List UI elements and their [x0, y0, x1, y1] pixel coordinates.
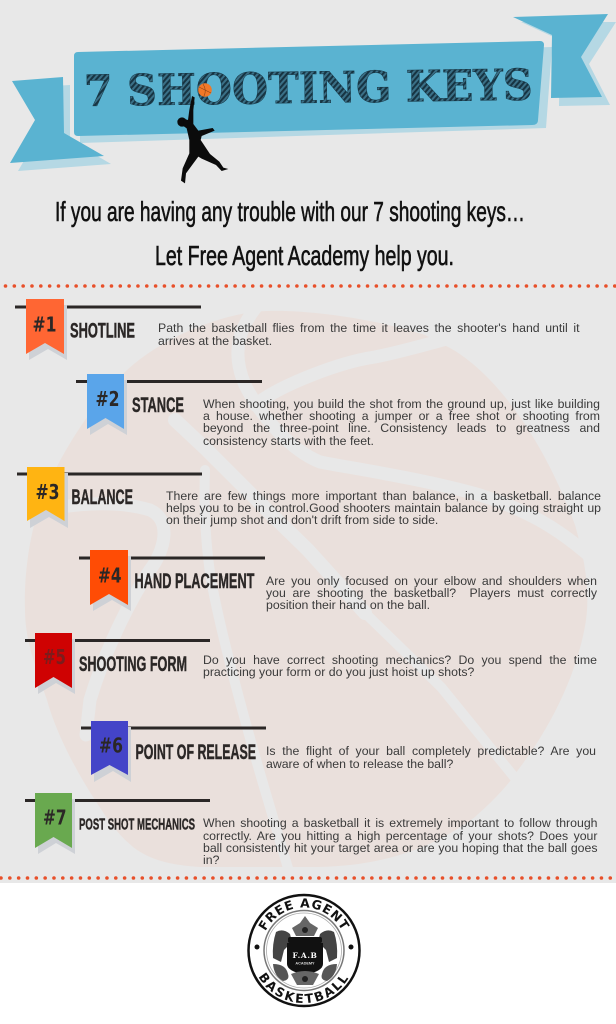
logo crest: ACADEMY	[295, 962, 315, 966]
text 7: correctly. Are you hitting a high percentage of your shots? Does your	[203, 829, 598, 843]
text 6	[266, 745, 596, 771]
text 3: helps you to be in control.Good shooters maintain balance by going straight up	[166, 501, 601, 515]
number 2: #2	[96, 387, 120, 411]
text 3	[166, 490, 601, 529]
key 7: post shot mechanics	[25, 793, 598, 868]
icon: basketball	[198, 83, 212, 97]
title text: 7 SHOOTING KEYS	[83, 61, 533, 117]
key 6: point of release	[81, 721, 596, 782]
key 3: balance	[17, 467, 601, 529]
heading 5: SHOOTING FORM	[79, 653, 187, 676]
ribbon 6	[91, 721, 131, 782]
number 5: #5	[43, 645, 66, 669]
ribbon 5	[35, 633, 75, 694]
heading 6: POINT OF RELEASE	[136, 741, 256, 764]
heading 1: SHOTLINE	[70, 320, 135, 343]
key 2: stance	[76, 374, 600, 449]
text 5	[203, 654, 597, 680]
number 3: #3	[36, 480, 60, 504]
ribbon 2	[87, 374, 127, 435]
banner body	[74, 41, 544, 136]
text 4: you are shooting the basketball? Players must correctly	[266, 586, 597, 600]
text 7: in?	[203, 853, 219, 867]
text 4: position their hand on the ball.	[266, 598, 430, 612]
text 1: arrives at the basket.	[158, 334, 272, 348]
dotted divider top	[6, 284, 616, 288]
banner shadow	[18, 22, 616, 171]
number 1: #1	[32, 313, 56, 337]
text 7	[203, 817, 598, 868]
key 4: hand placement	[79, 550, 597, 614]
ribbon 3	[27, 467, 68, 528]
text 7: ball consistently hit your target area or are you hoping that the ball goes	[203, 841, 598, 855]
number 7: #7	[43, 805, 66, 829]
text 5: practicing your form or do you just hoist up shots?	[203, 665, 474, 679]
number 4: #4	[98, 563, 122, 587]
dotted divider bottom	[1, 876, 616, 880]
text 2: consistency starts with the feet.	[203, 434, 374, 448]
logo bottom text: BASKETBALL	[258, 972, 348, 1003]
title banner	[10, 14, 616, 171]
text 2	[203, 398, 600, 449]
key 5: shooting form	[25, 633, 597, 694]
text 1	[158, 322, 580, 348]
logo crest: F.A.B	[293, 951, 317, 960]
heading 7: POST SHOT MECHANICS	[79, 816, 195, 833]
text 2: a house. whether shooting a jumper or a free shot or shooting from	[203, 409, 600, 423]
key 1: shotline	[15, 299, 580, 360]
text 4	[266, 575, 597, 614]
subtitle line 2: Let Free Agent Academy help you.	[155, 240, 454, 271]
text 3: on their jump shot and don't drift from side to side.	[166, 513, 438, 527]
icon: jumping player silhouette	[177, 96, 228, 183]
banner tails	[10, 14, 608, 163]
logo: Free Agent Basketball badge	[247, 894, 361, 1008]
ribbon 4	[90, 550, 131, 611]
ribbon 1	[26, 299, 67, 360]
text 6: aware of when to release the ball?	[266, 757, 453, 771]
logo crest	[273, 916, 337, 985]
heading 3: BALANCE	[72, 486, 133, 509]
logo top text: FREE AGENT	[258, 898, 350, 930]
number 6: #6	[99, 733, 123, 757]
text 2: beyond the three-point line. Consistency leads to greatness and	[203, 421, 600, 435]
heading 4: HAND PLACEMENT	[134, 570, 255, 593]
ribbon 7	[35, 793, 75, 854]
background basketball	[20, 300, 610, 875]
heading 2: STANCE	[132, 394, 184, 417]
